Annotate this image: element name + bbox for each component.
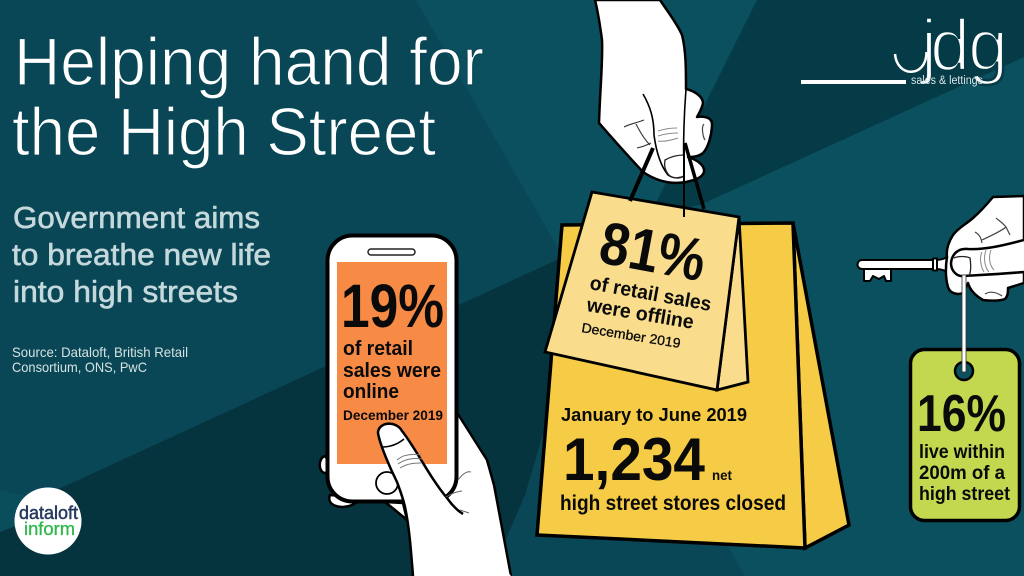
icon: price tag bbox=[910, 350, 1020, 520]
stat: 16 percent near high street: live within bbox=[919, 442, 1005, 463]
icon: hand holding key bbox=[946, 196, 1024, 301]
icon: tag hole bbox=[955, 362, 973, 380]
stat: store closures: 1,234 bbox=[563, 426, 706, 493]
icon: hand holding bag bbox=[595, 0, 712, 217]
logo: jdg sales and lettings: sales & lettings bbox=[911, 75, 983, 87]
icon: fingers and back of hand behind phone bbox=[320, 411, 511, 576]
stat: 19 percent online: 19% bbox=[341, 272, 444, 340]
stat: 16 percent near high street: 200m of a bbox=[919, 463, 1005, 484]
title bbox=[12, 24, 484, 170]
icon: large yellow bag bbox=[537, 223, 849, 548]
logo: jdg sales and lettings bbox=[801, 6, 1008, 87]
stat: 81 percent offline bbox=[581, 209, 713, 351]
icon: thumb on phone bbox=[378, 424, 511, 576]
logo: jdg sales and lettings: jdg bbox=[919, 6, 1008, 86]
icon: phone body bbox=[328, 236, 456, 502]
stat: 81 percent offline: of retail sales bbox=[588, 272, 713, 316]
source note: Consortium, ONS, PwC bbox=[12, 359, 147, 375]
stat: 81 percent offline: were offline bbox=[584, 294, 695, 334]
subtitle: into high streets bbox=[13, 274, 238, 309]
subtitle: Government aims bbox=[13, 200, 260, 235]
phone group bbox=[320, 236, 511, 576]
stat: 81 percent offline: 81% bbox=[595, 209, 711, 294]
subtitle: to breathe new life bbox=[12, 237, 271, 272]
icon: key bbox=[858, 254, 952, 281]
stat: 16 percent near high street: high street bbox=[919, 484, 1011, 505]
stat: 19 percent online: December 2019 bbox=[343, 408, 443, 423]
stat: store closures bbox=[560, 405, 786, 515]
stat: 19 percent online: sales were bbox=[343, 360, 441, 382]
stat: 81 percent offline: December 2019 bbox=[581, 320, 682, 351]
source note: Source: Dataloft, British Retail bbox=[12, 344, 188, 360]
icon: small bag bbox=[545, 192, 748, 390]
stat: 16 percent near high street bbox=[917, 385, 1011, 505]
stat: 16 percent near high street: 16% bbox=[917, 385, 1006, 443]
tag string bbox=[962, 275, 966, 372]
stat: store closures: net bbox=[712, 468, 732, 483]
stat: 19 percent online: online bbox=[343, 381, 399, 403]
bag handles bbox=[630, 143, 704, 217]
logo: dataloft inform badge bbox=[14, 488, 82, 554]
stat: 19 percent online: of retail bbox=[343, 338, 413, 360]
key and tag group bbox=[858, 196, 1024, 520]
logo: dataloft inform badge: inform bbox=[24, 519, 75, 539]
stat: store closures: January to June 2019 bbox=[561, 405, 747, 425]
icon: phone home button bbox=[376, 472, 398, 494]
source note bbox=[12, 344, 188, 375]
stat: 19 percent online bbox=[341, 272, 444, 423]
logo: dataloft inform badge: dataloft bbox=[19, 503, 78, 523]
subtitle bbox=[12, 200, 271, 309]
icon: phone speaker bbox=[368, 249, 415, 255]
title: the High Street bbox=[12, 94, 436, 170]
title: Helping hand for bbox=[14, 24, 484, 100]
phone screen bbox=[337, 262, 447, 464]
stat: store closures: high street stores closed bbox=[560, 492, 786, 515]
shopping bags bbox=[537, 192, 849, 548]
